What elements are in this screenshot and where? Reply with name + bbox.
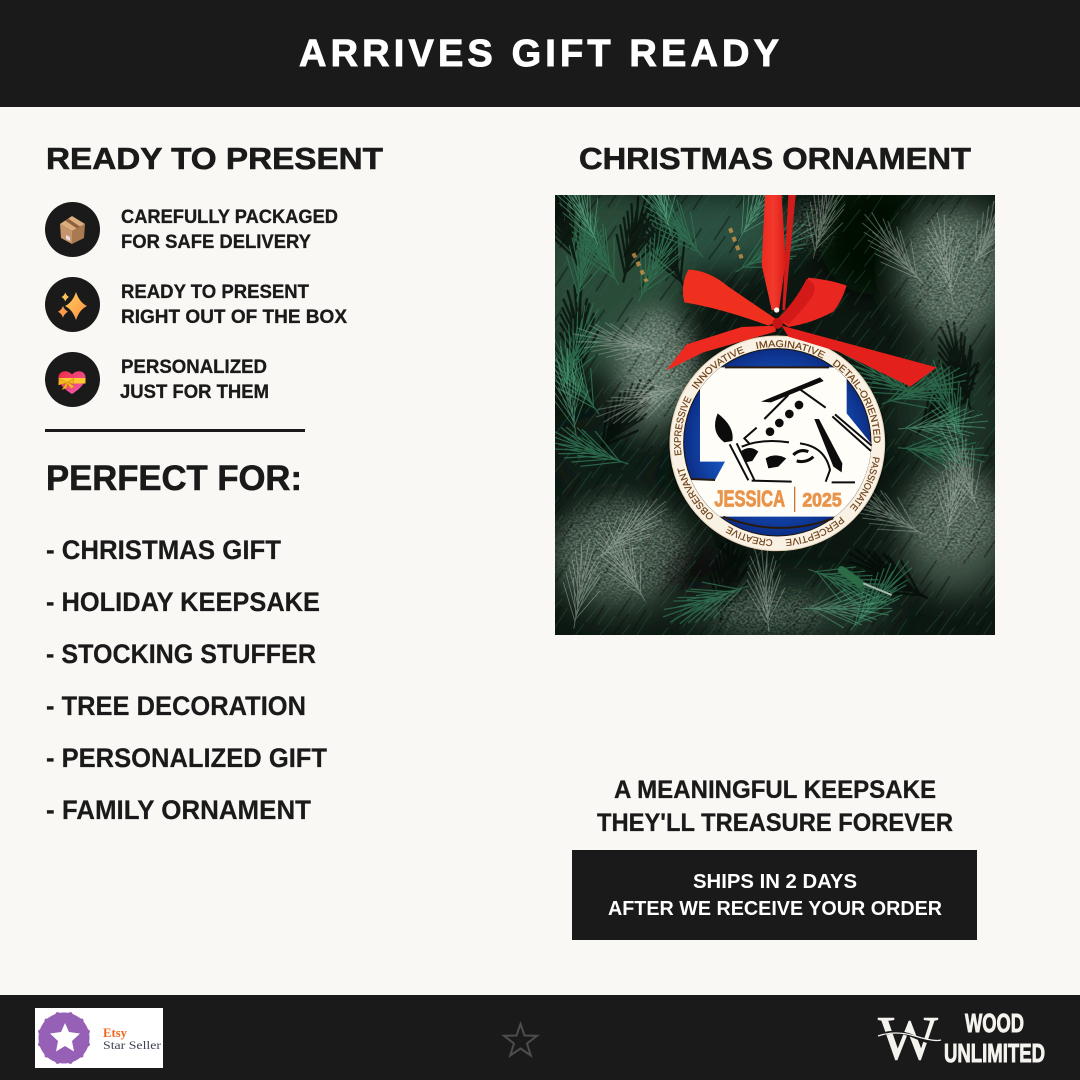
logo mark: W xyxy=(878,1005,938,1073)
dark needle shadows xyxy=(555,195,980,623)
red ribbon bow xyxy=(666,270,937,387)
word ring xyxy=(674,340,880,546)
heading: perfect for: PERFECT FOR: xyxy=(46,459,302,498)
list: perfect for items: - HOLIDAY KEEPSAKE xyxy=(46,587,320,617)
callout box: shipping xyxy=(572,850,977,940)
heading: christmas ornament: CHRISTMAS ORNAMENT xyxy=(579,141,971,176)
icon: purple star badge xyxy=(37,1011,91,1065)
white artwork panel xyxy=(691,367,872,517)
callout: meaningful keepsake: A MEANINGFUL KEEPSAKE xyxy=(614,776,936,804)
list: perfect for items: - FAMILY ORNAMENT xyxy=(46,795,311,825)
name and year engraving: 2025 xyxy=(802,491,842,512)
word ring: INNOVATIVE xyxy=(692,346,744,390)
list: perfect for items: - STOCKING STUFFER xyxy=(46,639,316,669)
word ring: IMAGINATIVE xyxy=(756,340,826,359)
feature text xyxy=(121,282,347,328)
logo: wood unlimited xyxy=(878,1005,1045,1073)
icon: package box xyxy=(45,202,100,257)
feature text: FOR SAFE DELIVERY xyxy=(121,232,311,253)
list: perfect for items: - PERSONALIZED GIFT xyxy=(46,743,327,773)
feature text: READY TO PRESENT xyxy=(121,282,309,303)
ornament: wooden disc xyxy=(668,336,887,552)
feature text: JUST FOR THEM xyxy=(120,382,269,403)
blue inlay xyxy=(684,349,871,536)
pine tree background xyxy=(555,195,995,635)
photo: ornament on pine tree xyxy=(555,195,995,635)
callout box: shipping: SHIPS IN 2 DAYS xyxy=(693,871,857,893)
fairy light xyxy=(633,228,892,595)
word ring: CREATIVE xyxy=(726,526,772,546)
icon: center star outline xyxy=(504,1024,537,1056)
name and year engraving: JESSICA xyxy=(714,486,785,512)
callout box: shipping: AFTER WE RECEIVE YOUR ORDER xyxy=(608,898,943,920)
list: perfect for items: - TREE DECORATION xyxy=(46,691,306,721)
word ring: PERCEPTIVE xyxy=(786,516,844,546)
feature: ready out of the box xyxy=(45,277,347,332)
word ring: DETAIL-ORIENTED xyxy=(832,359,880,443)
icon: gift heart xyxy=(45,352,100,407)
word ring: EXPRESSIVE xyxy=(674,396,692,456)
feature text: PERSONALIZED xyxy=(121,357,267,378)
list: perfect for items xyxy=(46,535,327,825)
feature text xyxy=(120,357,269,403)
frosted needles xyxy=(563,195,995,632)
footer bar xyxy=(0,995,1080,1080)
header banner xyxy=(0,0,1080,107)
artist palette artwork xyxy=(691,367,872,528)
icon: sparkles xyxy=(45,277,100,332)
badge: etsy star seller xyxy=(35,1008,163,1068)
feature: personalized xyxy=(45,352,269,407)
bright needles xyxy=(555,195,988,628)
feature: carefully packaged xyxy=(45,202,338,257)
feature text: RIGHT OUT OF THE BOX xyxy=(121,307,347,328)
badge: etsy star seller: Star Seller xyxy=(103,1038,161,1052)
title: ARRIVES GIFT READY xyxy=(299,33,779,75)
heading: ready to present: READY TO PRESENT xyxy=(46,141,383,176)
feature text xyxy=(121,207,338,253)
callout: meaningful keepsake xyxy=(597,776,953,837)
word ring: PASSIONATE xyxy=(850,457,880,512)
ribbon strap behind ornament xyxy=(762,195,796,310)
green needles xyxy=(555,195,989,631)
word ring: OBSERVANT xyxy=(677,468,713,520)
logo: wood unlimited: WOOD xyxy=(965,1008,1024,1038)
callout: meaningful keepsake: THEY'LL TREASURE FOREVER xyxy=(597,809,953,837)
feature text: CAREFULLY PACKAGED xyxy=(121,207,338,228)
badge: etsy star seller: Etsy xyxy=(103,1025,127,1040)
list: perfect for items: - CHRISTMAS GIFT xyxy=(46,535,281,565)
